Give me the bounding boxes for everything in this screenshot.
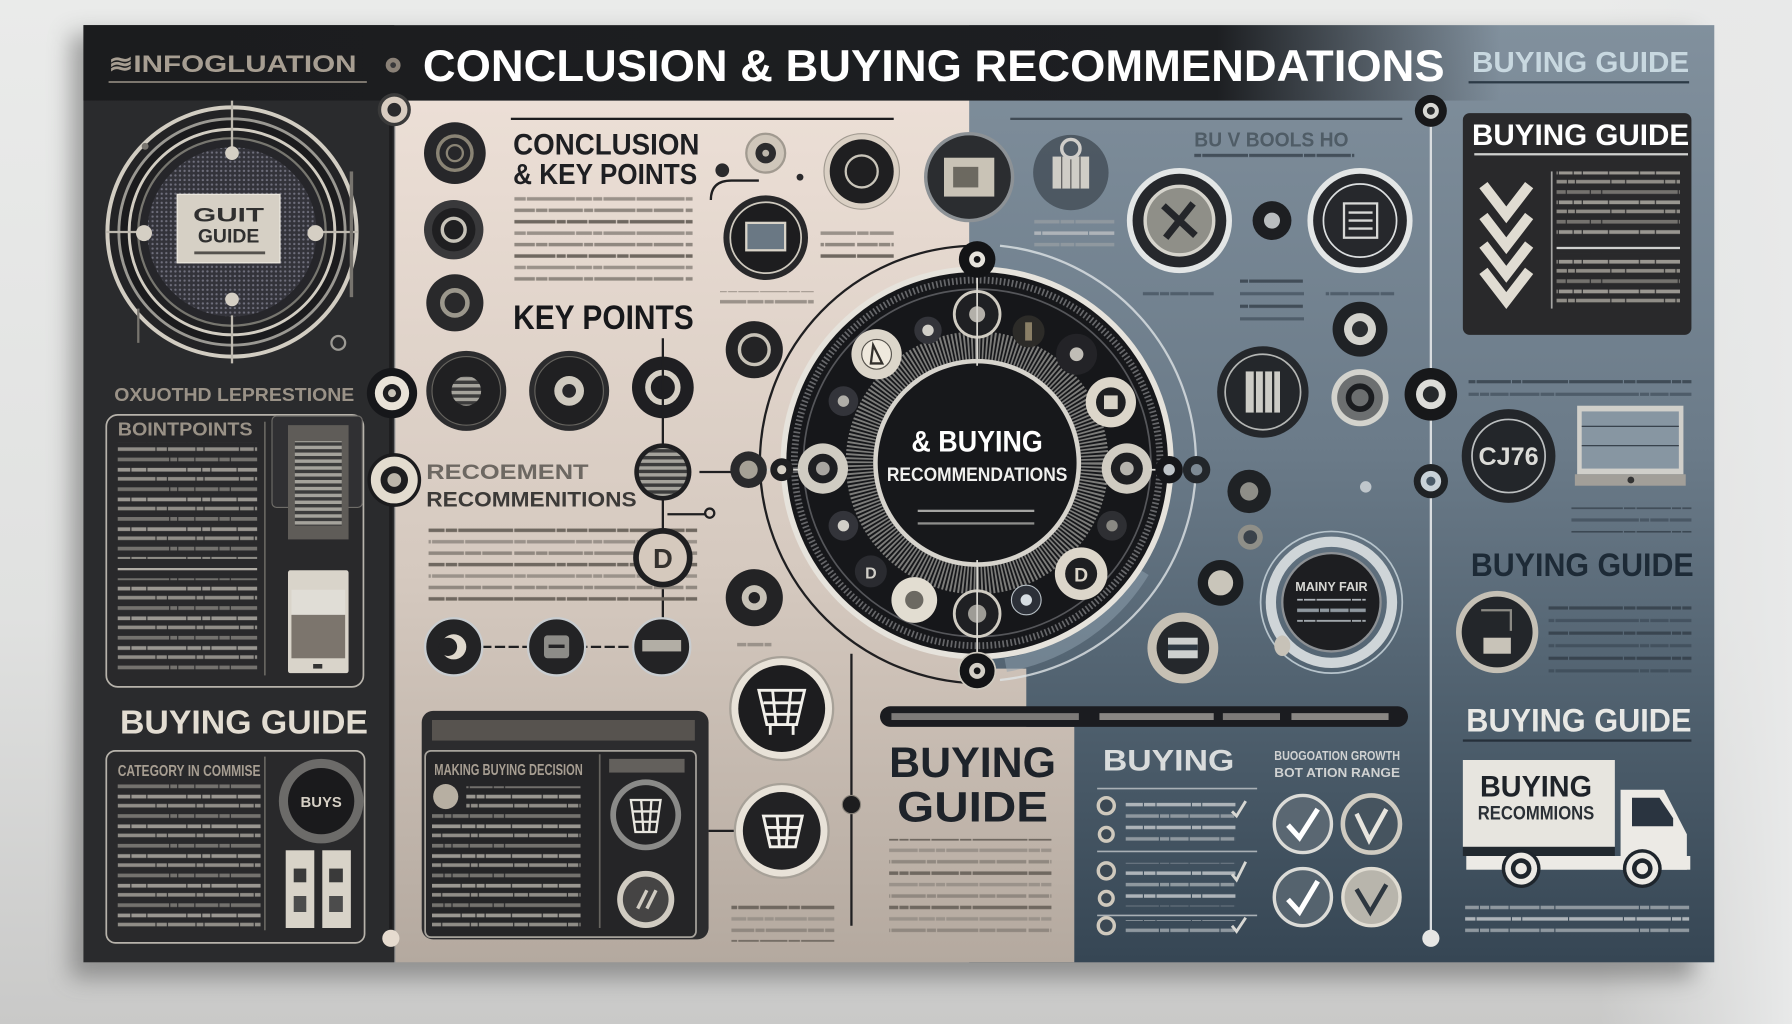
heading: buying guide dark: BUYING GUIDE xyxy=(1471,547,1694,583)
icon: delivery truck: RECOMMIONS xyxy=(1478,802,1594,824)
icon column xyxy=(424,122,486,331)
panel: dark shopping card: MAKING BUYING DECISION xyxy=(434,762,583,779)
top cluster icons on beige xyxy=(715,134,899,651)
rail nodes xyxy=(367,95,1457,947)
text block: slate top xyxy=(1469,375,1691,400)
sparse dial side marks xyxy=(137,143,353,350)
text block xyxy=(118,784,261,933)
icon: round button xyxy=(617,871,674,928)
check badges xyxy=(1274,795,1400,926)
icon: cart large xyxy=(730,657,833,760)
dashed connector xyxy=(454,646,663,648)
text block xyxy=(889,839,1051,933)
icon: cart small xyxy=(735,784,829,878)
connector end dot xyxy=(705,509,714,518)
panel: slate right background xyxy=(969,25,1714,962)
list ticks xyxy=(1232,801,1246,931)
icon: small cards xyxy=(286,850,351,928)
hub nodes: D xyxy=(865,565,877,582)
text block: header xyxy=(432,720,695,741)
panel: key points card xyxy=(106,415,363,687)
heading xyxy=(426,459,637,511)
icon: D node: D xyxy=(653,543,673,574)
heading xyxy=(513,128,699,191)
center disc xyxy=(873,359,1081,567)
text block xyxy=(429,526,697,606)
icon: delivery truck xyxy=(1463,760,1690,888)
text block xyxy=(118,578,257,674)
heading: buying guide left: BUYING GUIDE xyxy=(120,705,368,742)
small caption xyxy=(1274,749,1400,780)
small caption xyxy=(737,640,771,651)
icon: delivery truck: BUYING xyxy=(1480,771,1592,804)
icon: badge: CJ76 xyxy=(1479,443,1539,471)
text block xyxy=(1194,152,1354,161)
panel: dark shopping card xyxy=(422,711,709,939)
section: buying header on slate: BU V BOOLS HO xyxy=(1194,128,1349,151)
text block xyxy=(1034,219,1114,247)
icon: badge xyxy=(279,759,363,843)
device: phone xyxy=(288,570,349,673)
panel: dark left column xyxy=(83,25,394,962)
text block xyxy=(432,814,581,928)
icon: badge xyxy=(1462,409,1555,503)
heading: RECOEMENT xyxy=(426,459,589,484)
icon: laptop xyxy=(1575,406,1686,486)
vertical rail left xyxy=(389,110,393,938)
header dot xyxy=(386,58,401,73)
hub outer nodes xyxy=(730,241,1210,689)
heading: KEY POINTS xyxy=(513,299,694,337)
text block xyxy=(466,786,581,811)
section: conclusion and key points xyxy=(424,118,894,431)
text block xyxy=(514,194,693,283)
icon row xyxy=(425,618,690,675)
hub nodes: D xyxy=(1074,565,1088,587)
section: buying header on slate xyxy=(1010,118,1402,161)
small caption: BUOGOATION GROWTH xyxy=(1274,749,1400,763)
text block xyxy=(720,291,814,307)
panel: guide card xyxy=(106,751,365,943)
slate icons xyxy=(926,134,1413,683)
panel: buying guide dark card: BUYING GUIDE xyxy=(1472,119,1689,152)
section: recommendations xyxy=(425,443,697,675)
heading: CONCLUSION xyxy=(513,128,699,161)
slate icons: MAINY FAIR xyxy=(1295,580,1368,594)
icon: D node xyxy=(633,528,693,587)
section: buying checklist: BUYING xyxy=(1103,744,1234,777)
ribbon bar xyxy=(880,706,1408,727)
hub nodes xyxy=(798,291,1152,637)
heading: buying guide beige: BUYING xyxy=(889,739,1056,786)
heading: buying guide beige: GUIDE xyxy=(897,784,1048,831)
text block xyxy=(118,442,257,559)
connector lines xyxy=(663,181,851,926)
text block xyxy=(1557,171,1680,238)
center disc: RECOMMENDATIONS xyxy=(887,464,1067,486)
device: screen xyxy=(272,416,362,539)
small caption: BOT ATION RANGE xyxy=(1274,766,1400,780)
title: CONCLUSION & BUYING RECOMMENDATIONS xyxy=(423,42,1445,91)
subheading: illegible left: OXUOTHD LEPRESTIONE xyxy=(114,384,354,405)
left header label: ≋INFOGLUATION xyxy=(109,51,357,78)
list icons xyxy=(1098,798,1114,934)
panel: buying guide dark card xyxy=(1463,113,1691,335)
vertical rail right xyxy=(1430,111,1432,937)
heading: buying guide beige xyxy=(889,739,1056,831)
central hub xyxy=(730,241,1210,689)
node on vertical connector xyxy=(842,795,861,814)
center disc: & BUYING xyxy=(911,425,1043,458)
icon: basket badge xyxy=(610,779,681,850)
icon row xyxy=(426,351,694,431)
icon: striped node xyxy=(634,443,691,501)
text block xyxy=(1240,272,1304,327)
panel: key points card: BOINTPOINTS xyxy=(118,418,253,439)
heading: & KEY POINTS xyxy=(513,159,697,191)
hub spokes xyxy=(766,274,1197,671)
text block xyxy=(1549,601,1691,677)
text block xyxy=(1571,507,1691,533)
label card xyxy=(177,194,280,263)
label card: GUIT xyxy=(193,205,264,227)
list text xyxy=(1126,798,1235,936)
text block xyxy=(1465,903,1689,933)
emblem: guide dial xyxy=(106,101,358,363)
icon: chevrons xyxy=(1483,185,1529,301)
heading: RECOMMENITIONS xyxy=(426,486,637,511)
title bar band xyxy=(83,25,1501,101)
heading: buying guide on band: BUYING GUIDE xyxy=(1466,702,1691,738)
panel: guide card: CATEGORY IN COMMISE xyxy=(118,763,261,780)
icon: badge: BUYS xyxy=(301,795,342,811)
section: buying checklist xyxy=(1097,744,1400,936)
icon: store badge xyxy=(1456,591,1538,673)
label card: GUIDE xyxy=(198,225,259,247)
text block: caption xyxy=(731,903,834,942)
text block xyxy=(1143,283,1214,297)
right header label: BUYING GUIDE xyxy=(1472,47,1689,79)
text block xyxy=(1326,283,1394,297)
text block xyxy=(1557,254,1680,309)
panel: beige middle background xyxy=(395,101,1074,962)
text block xyxy=(821,224,894,263)
